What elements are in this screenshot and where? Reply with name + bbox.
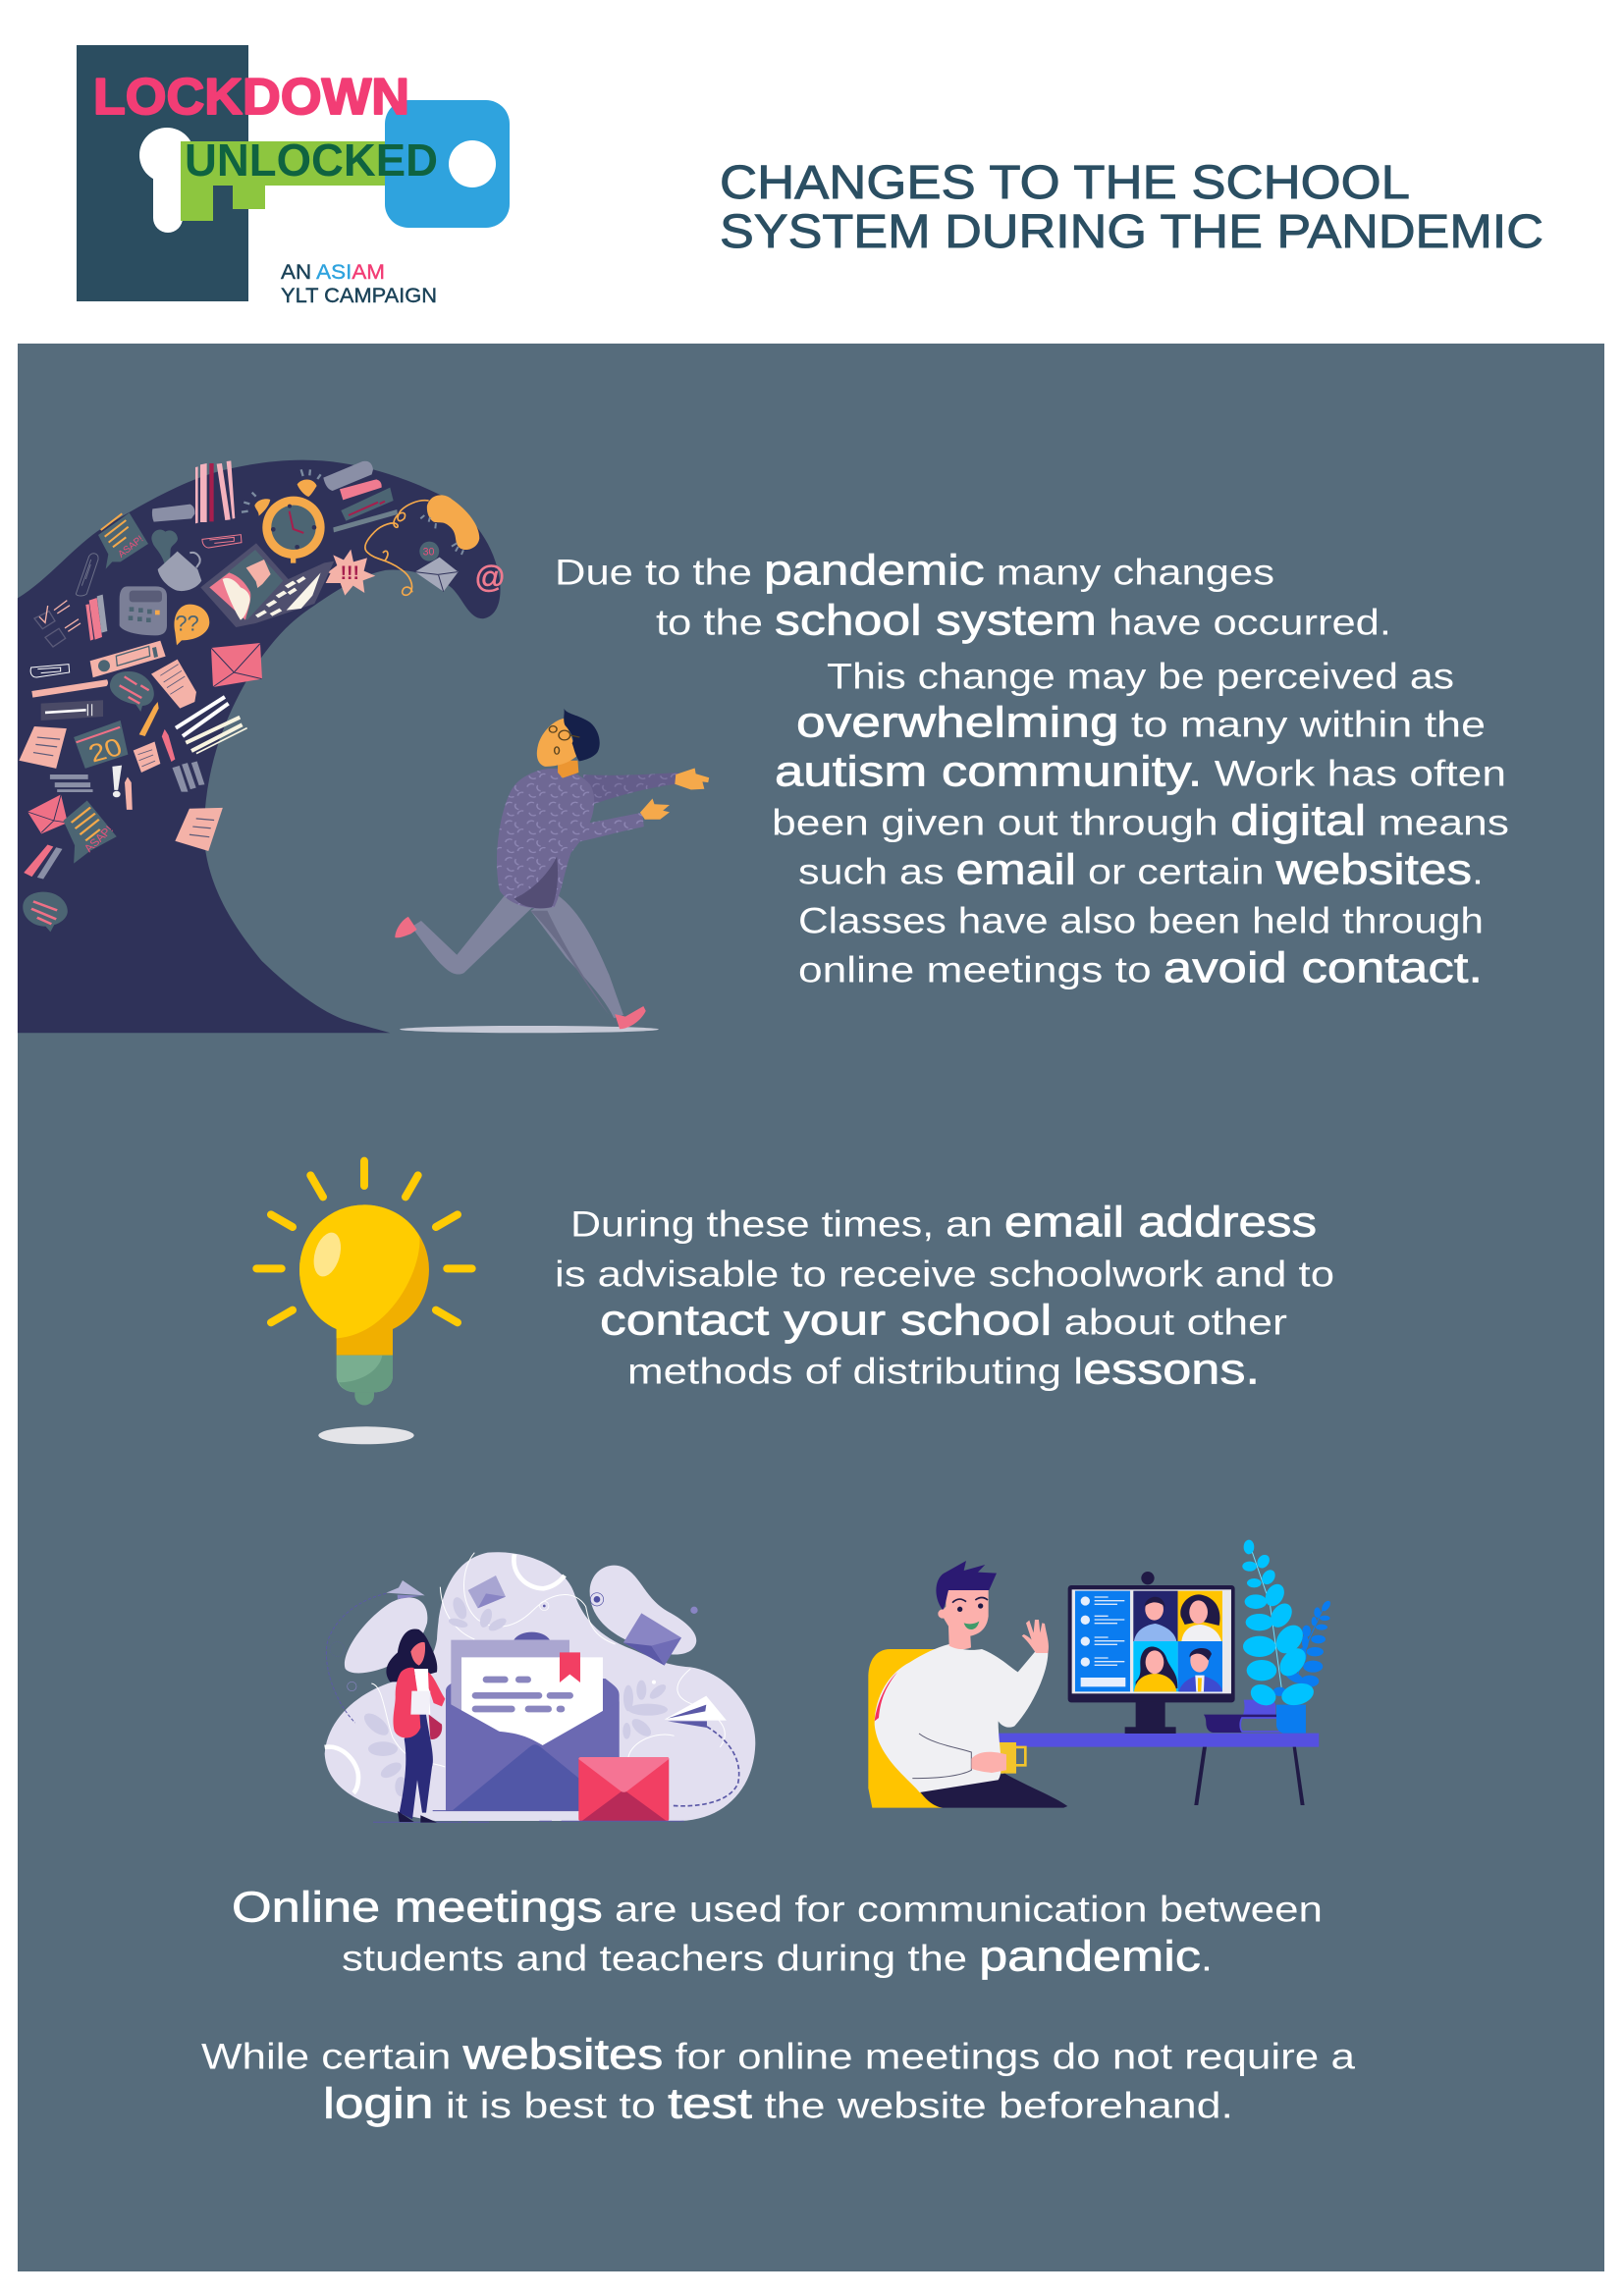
red envelope bbox=[578, 1757, 669, 1821]
text block: intro: been given out through digital means bbox=[772, 797, 1509, 844]
hand on mug bbox=[971, 1752, 1006, 1773]
pink envelope bbox=[211, 643, 262, 687]
hair bbox=[936, 1561, 997, 1610]
text block: intro: such as email or certain websites . bbox=[798, 846, 1484, 893]
text block: online meetings: students and teachers during the pandemic . bbox=[342, 1932, 1213, 1981]
white accents bbox=[325, 1553, 725, 1793]
ground lines bbox=[373, 1811, 684, 1822]
text block: intro: Due to the pandemic many changes bbox=[555, 546, 1274, 595]
illustration: email envelope and woman bbox=[325, 1552, 755, 1823]
badge and grey envelope bbox=[415, 542, 459, 592]
large envelope bbox=[446, 1632, 620, 1811]
starburst bbox=[326, 550, 375, 596]
logo wordmark: LOCKDOWN: LOCKDOWN bbox=[93, 69, 409, 126]
logo wordmark: UNLOCKED: UNLOCKED bbox=[185, 134, 438, 186]
text block: email advice: During these times, an email address bbox=[570, 1198, 1317, 1247]
shoes bbox=[395, 917, 417, 937]
glasses bbox=[549, 726, 579, 740]
illustration: video call at desk bbox=[868, 1540, 1332, 1808]
hair bbox=[564, 709, 600, 762]
text block: intro bbox=[555, 546, 1509, 991]
clock bbox=[242, 469, 325, 563]
paper plane top left bbox=[326, 1580, 425, 1723]
icon: light bulb bbox=[256, 1161, 472, 1444]
highlight bbox=[309, 1229, 346, 1280]
title: CHANGES TO THE SCHOOL bbox=[720, 157, 1410, 209]
logo tagline: An AsIAm: AN ASIAM bbox=[281, 261, 385, 284]
text block: email advice: is advisable to receive schoolwork and to bbox=[555, 1255, 1334, 1294]
sweater bbox=[875, 1644, 1048, 1792]
stripes bbox=[85, 595, 107, 641]
books bbox=[195, 460, 235, 523]
binder bbox=[90, 641, 166, 677]
front leg bbox=[530, 894, 623, 1018]
speech bubble: lower left bbox=[23, 892, 68, 932]
telephone bbox=[365, 495, 479, 595]
blob background bbox=[325, 1552, 755, 1821]
calculator bbox=[120, 586, 167, 635]
shadow bbox=[318, 1426, 414, 1444]
question bubble: ?? bbox=[175, 612, 199, 636]
text block: online meetings: Online meetings are used for communication between bbox=[232, 1883, 1323, 1932]
sticky note bbox=[19, 726, 67, 769]
starburst: !!! bbox=[341, 563, 359, 584]
logo tagline: YLT campaign: YLT CAMPAIGN bbox=[281, 285, 437, 307]
glass bbox=[299, 1204, 429, 1356]
text block: email advice bbox=[555, 1198, 1334, 1394]
title bbox=[720, 157, 1543, 258]
grey cylinder bbox=[152, 505, 194, 522]
logo: Lockdown Unlocked bbox=[77, 45, 510, 307]
sidebar bbox=[1075, 1591, 1130, 1691]
text block: websites: While certain websites for online meetings do not require a bbox=[201, 2030, 1355, 2079]
text block: intro: to the school system have occurred. bbox=[656, 597, 1391, 644]
calendar: 20 bbox=[84, 732, 126, 768]
woman bbox=[386, 1629, 445, 1823]
rays bbox=[256, 1161, 472, 1322]
monitor bbox=[1068, 1572, 1235, 1734]
front arm bbox=[526, 813, 644, 845]
text block: online meetings bbox=[232, 1883, 1323, 1981]
text block: intro: autism community. Work has often bbox=[775, 748, 1506, 795]
text block: intro: This change may be perceived as bbox=[827, 656, 1454, 697]
face bbox=[952, 1597, 988, 1629]
calendar bbox=[74, 721, 128, 769]
participants bbox=[1134, 1624, 1176, 1641]
cylinder, notebook and stapler bbox=[323, 461, 398, 532]
base bbox=[337, 1356, 393, 1392]
rod bbox=[31, 679, 108, 698]
coffee mug bbox=[151, 529, 201, 591]
title: SYSTEM DURING THE PANDEMIC bbox=[720, 206, 1543, 258]
stripes lower left bbox=[24, 844, 62, 880]
shadow bbox=[400, 1026, 659, 1033]
speech bubble: ASAP bottom bbox=[63, 801, 117, 864]
question bubble bbox=[174, 605, 209, 645]
laptop bbox=[200, 543, 334, 627]
text block: email advice: methods of distributing l essons. bbox=[627, 1345, 1260, 1394]
speech bubble: ASAP bottom: ASAP! bbox=[81, 824, 116, 854]
man running bbox=[395, 709, 709, 1033]
ASAP speech bubble: ASAP! bbox=[116, 534, 145, 561]
rear arm bbox=[583, 773, 679, 806]
chair bbox=[868, 1649, 943, 1808]
torso bbox=[497, 769, 594, 908]
speech bubble bbox=[110, 671, 154, 712]
text block: websites: login it is best to test the website beforehand. bbox=[323, 2079, 1233, 2128]
bookmark bbox=[560, 1652, 580, 1682]
small note, marker and stripes bbox=[50, 729, 204, 792]
text block: websites bbox=[201, 2030, 1355, 2128]
leaves bbox=[360, 1595, 669, 1796]
head bbox=[943, 1590, 989, 1649]
tiles bbox=[1133, 1591, 1178, 1641]
wave bbox=[18, 460, 501, 1033]
lower objects in the wave bbox=[19, 721, 223, 932]
desk bbox=[999, 1734, 1319, 1747]
white marker strokes bbox=[176, 697, 247, 754]
dark box bbox=[41, 700, 103, 721]
sticky note edge bbox=[175, 808, 223, 851]
letter lines bbox=[475, 1680, 570, 1709]
floating envelopes bbox=[468, 1575, 681, 1666]
pencil bbox=[139, 702, 159, 736]
neck and head bbox=[558, 761, 578, 778]
note page bbox=[151, 660, 196, 709]
text block: intro: online meetings to avoid contact. bbox=[798, 944, 1483, 991]
checklist bbox=[34, 601, 81, 647]
text block: email advice: contact your school about other bbox=[600, 1296, 1287, 1345]
plant bbox=[1242, 1540, 1332, 1734]
upper objects in the wave bbox=[30, 460, 506, 754]
pink envelope left bbox=[27, 794, 68, 833]
paper plane right bbox=[665, 1696, 739, 1806]
paper clips bbox=[30, 535, 242, 677]
badge and grey envelope: 30 bbox=[423, 547, 435, 559]
dots bbox=[540, 1593, 698, 1684]
legs bbox=[920, 1774, 1067, 1808]
mug bbox=[990, 1742, 1025, 1774]
books bbox=[1204, 1700, 1281, 1733]
text block: intro: Classes have also been held through bbox=[798, 901, 1484, 940]
ASAP speech bubble bbox=[98, 512, 148, 569]
text block: intro: overwhelming to many within the bbox=[796, 699, 1486, 746]
exclamation and pencil bbox=[112, 766, 133, 810]
illustration: wave of school work bbox=[18, 460, 709, 1033]
waving hand bbox=[1022, 1620, 1049, 1653]
at sign: @ bbox=[474, 560, 506, 594]
back leg bbox=[411, 892, 533, 975]
